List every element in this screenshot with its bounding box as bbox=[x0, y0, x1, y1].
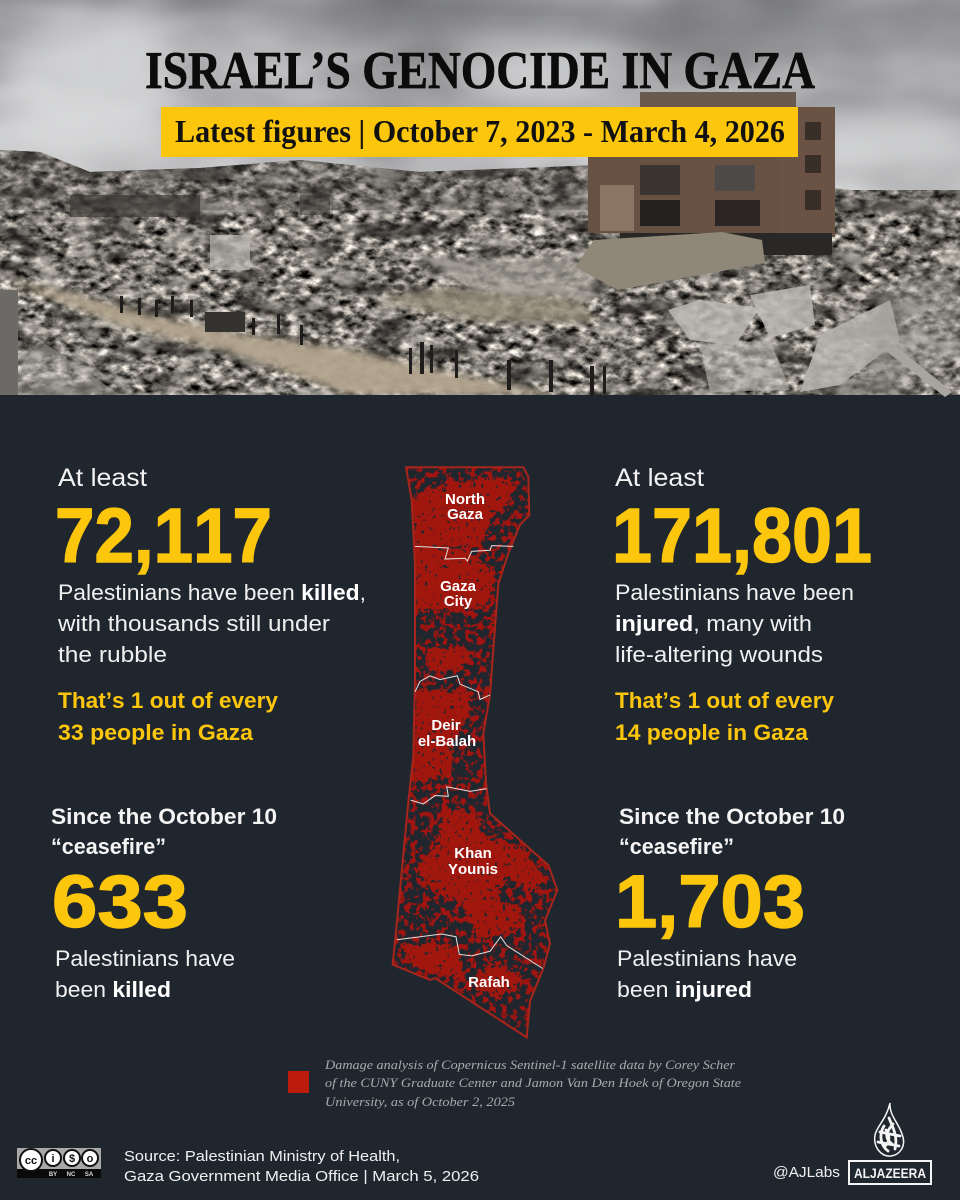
people on the road bbox=[120, 296, 606, 396]
icon: creative commons licence badge: cc bbox=[25, 1155, 37, 1167]
map labels: North bbox=[445, 491, 485, 508]
source text bbox=[124, 1149, 479, 1185]
injured description: life-altering wounds bbox=[615, 642, 823, 667]
injured since ceasefire description: been injured bbox=[617, 977, 752, 1002]
dark background panel bbox=[0, 395, 960, 1200]
map labels: Deir bbox=[431, 717, 461, 734]
killed figure: 72,117 bbox=[55, 493, 272, 579]
map labels bbox=[418, 491, 510, 991]
icon: creative commons licence badge: $ bbox=[69, 1153, 75, 1165]
source text: Source: Palestinian Ministry of Health, bbox=[124, 1149, 400, 1165]
killed description: Palestinians have been killed, bbox=[58, 580, 366, 605]
icon: creative commons licence badge: o bbox=[87, 1153, 94, 1165]
injured since ceasefire heading bbox=[619, 804, 845, 859]
map labels: Khan bbox=[454, 845, 492, 862]
icon: creative commons licence badge: SA bbox=[85, 1172, 94, 1178]
subtitle banner: Latest figures | October 7, 2023 - March 4, 2026 bbox=[175, 113, 785, 149]
at least label: At least bbox=[58, 464, 147, 492]
killed description bbox=[57, 580, 366, 667]
legend text bbox=[324, 1057, 741, 1109]
injured description bbox=[615, 580, 854, 667]
injured since ceasefire figure: 1,703 bbox=[615, 860, 805, 943]
killed since ceasefire heading bbox=[51, 804, 277, 859]
killed since ceasefire description: Palestinians have bbox=[55, 946, 235, 971]
concrete block bbox=[575, 232, 765, 290]
killed ratio bbox=[58, 688, 279, 745]
injured description: Palestinians have been bbox=[615, 580, 854, 605]
legend swatch bbox=[288, 1071, 309, 1093]
injured ratio: 14 people in Gaza bbox=[615, 720, 809, 745]
handle: @AJLabs bbox=[773, 1165, 840, 1181]
icon: creative commons licence badge bbox=[17, 1148, 101, 1178]
injured since ceasefire description bbox=[617, 946, 797, 1002]
killed since ceasefire description: been killed bbox=[55, 977, 171, 1002]
governorate boundaries bbox=[397, 546, 543, 968]
injured description: injured, many with bbox=[615, 611, 812, 636]
subtitle banner bbox=[161, 107, 798, 157]
damage areas bbox=[390, 465, 560, 1039]
icon: creative commons licence badge: NC bbox=[67, 1172, 76, 1178]
killed since ceasefire figure: 633 bbox=[52, 860, 188, 943]
injured since ceasefire heading: “ceasefire” bbox=[619, 834, 734, 859]
injured since ceasefire description: Palestinians have bbox=[617, 946, 797, 971]
legend bbox=[288, 1057, 741, 1109]
map labels: Gaza bbox=[447, 506, 484, 523]
killed ratio: 33 people in Gaza bbox=[58, 720, 254, 745]
source text: Gaza Government Media Office | March 5, 2026 bbox=[124, 1169, 479, 1185]
map labels: Rafah bbox=[468, 974, 510, 991]
fallen beam bbox=[885, 345, 952, 397]
legend text: of the CUNY Graduate Center and Jamon Van Den Hoek of Oregon State bbox=[325, 1075, 741, 1090]
map labels: Gaza bbox=[440, 578, 477, 595]
Al Jazeera wordmark bbox=[849, 1161, 931, 1184]
map labels: el-Balah bbox=[418, 733, 476, 750]
icon: Al Jazeera calligraphy mark bbox=[875, 1103, 904, 1156]
killed description: with thousands still under bbox=[57, 611, 330, 636]
legend text: University, as of October 2, 2025 bbox=[325, 1094, 516, 1109]
panel: killed bbox=[51, 464, 366, 1002]
killed ratio: That’s 1 out of every bbox=[58, 688, 279, 713]
legend text: Damage analysis of Copernicus Sentinel-1 satellite data by Corey Scher bbox=[324, 1057, 736, 1072]
panel: injured bbox=[612, 464, 872, 1002]
building bbox=[588, 92, 835, 255]
photo: destroyed buildings under a cloudy sky bbox=[0, 0, 960, 397]
killed since ceasefire heading: “ceasefire” bbox=[51, 834, 166, 859]
map labels: City bbox=[444, 593, 473, 610]
killed since ceasefire heading: Since the October 10 bbox=[51, 804, 277, 829]
at least label: At least bbox=[615, 464, 704, 492]
map labels: Younis bbox=[448, 861, 498, 878]
injured since ceasefire heading: Since the October 10 bbox=[619, 804, 845, 829]
icon: creative commons licence badge: BY bbox=[49, 1172, 57, 1178]
injured figure: 171,801 bbox=[612, 493, 872, 579]
icon: creative commons licence badge: i bbox=[51, 1153, 55, 1165]
injured ratio bbox=[615, 688, 835, 745]
map: damage across the Gaza Strip bbox=[390, 465, 560, 1039]
killed description: the rubble bbox=[58, 642, 167, 667]
injured ratio: That’s 1 out of every bbox=[615, 688, 835, 713]
title: ISRAEL’S GENOCIDE IN GAZA bbox=[145, 42, 815, 100]
Al Jazeera wordmark: ALJAZEERA bbox=[854, 1165, 926, 1181]
killed since ceasefire description bbox=[55, 946, 235, 1002]
strip outline bbox=[393, 467, 557, 1037]
